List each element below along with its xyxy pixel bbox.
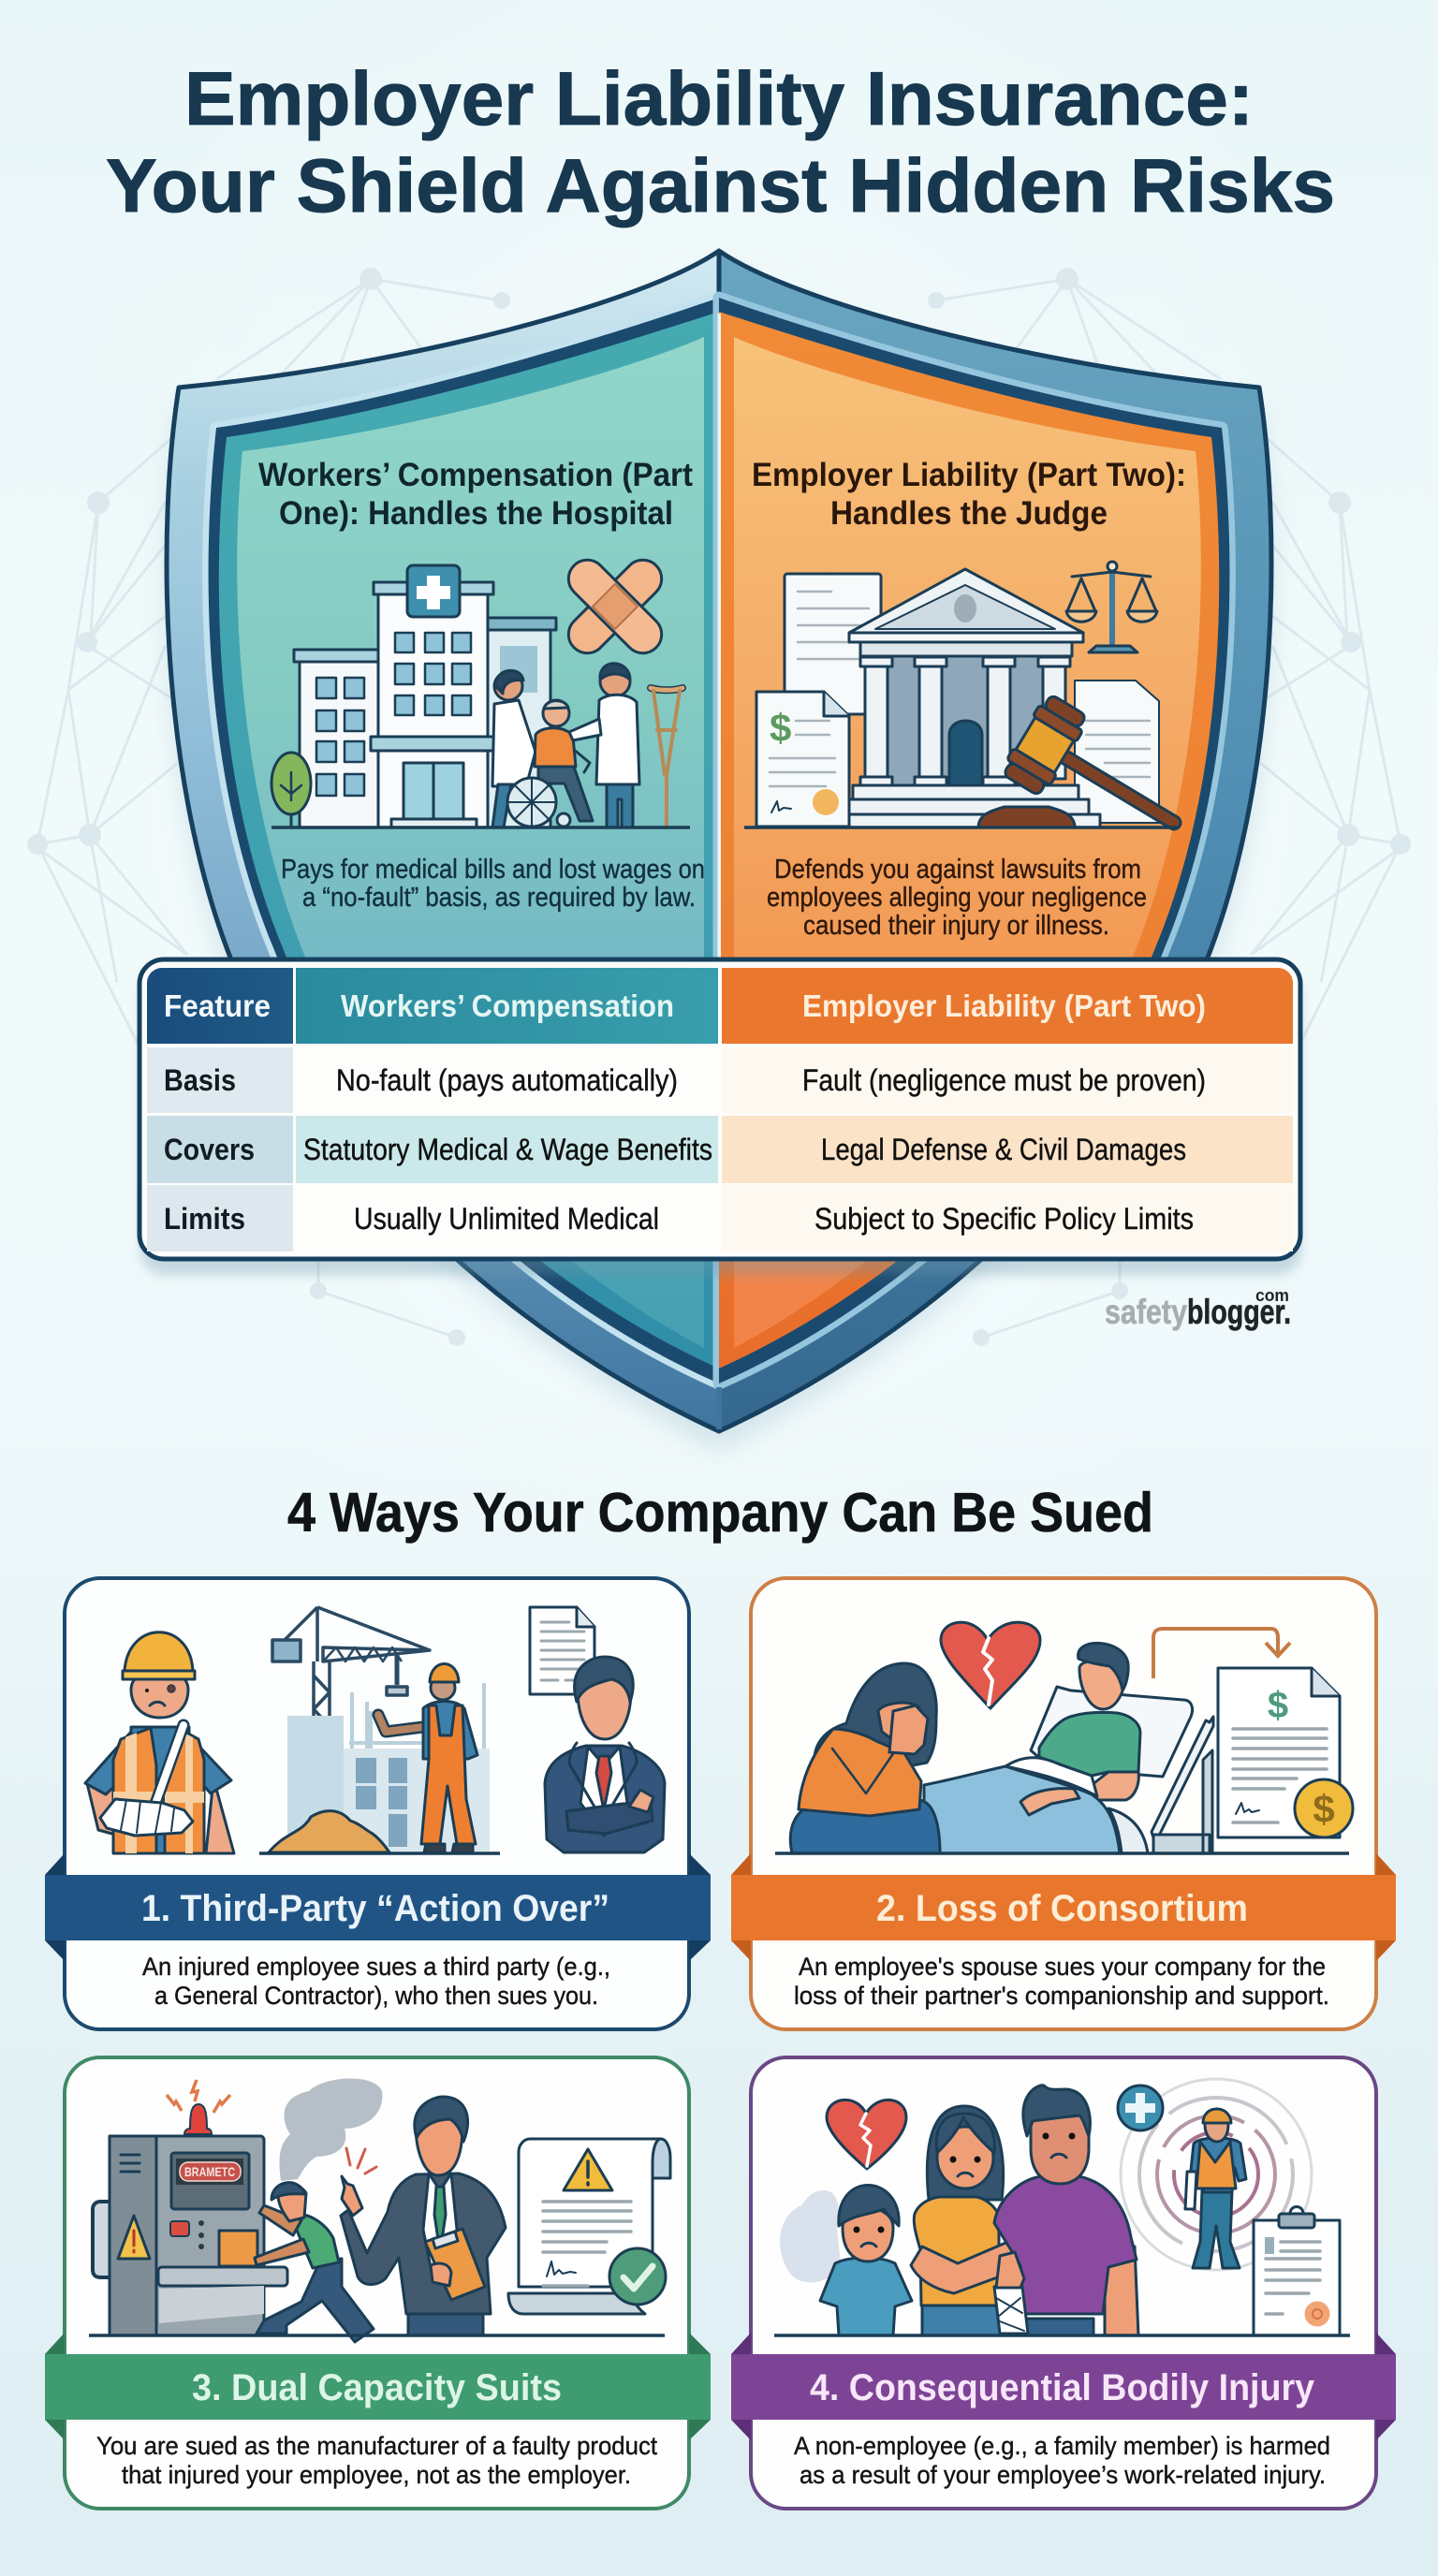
row: covers: Covers <box>164 1133 255 1166</box>
card 3 description: that injured your employee, not as the employer. <box>122 2461 631 2489</box>
heading: workers compensation: One): Handles the Hospital <box>279 495 673 532</box>
boy <box>820 2185 912 2335</box>
icon: alarm and sparks <box>167 2080 230 2134</box>
patient <box>1011 1643 1140 1804</box>
machine <box>93 2136 287 2335</box>
row: basis: No-fault (pays automatically) <box>336 1063 678 1097</box>
text block: employer liability description: caused their injury or illness. <box>803 911 1109 941</box>
nurse <box>492 670 536 827</box>
heading: workers compensation: Workers’ Compensation (Part <box>258 457 693 493</box>
card 2 description: An employee's spouse sues your company for the <box>799 1953 1326 1981</box>
card 2: loss of consortium <box>731 1578 1396 2029</box>
text block: workers comp description: a “no-fault” basis, as required by law. <box>302 883 696 913</box>
icon: broken heart <box>941 1622 1040 1708</box>
clipboard <box>1254 2207 1340 2335</box>
man <box>994 2086 1138 2335</box>
injured worker <box>85 1632 234 1853</box>
illustration: courthouse with gavel <box>744 562 1204 866</box>
documents behind courthouse <box>785 574 1159 823</box>
icon: coin: $ <box>1313 1787 1335 1831</box>
ribbon: green: 3. Dual Capacity Suits <box>192 2367 562 2408</box>
sound block <box>978 807 1075 827</box>
row: covers <box>147 1116 1293 1183</box>
card 3 description: You are sued as the manufacturer of a faulty product <box>96 2432 657 2460</box>
card 4 description: as a result of your employee’s work-related injury. <box>800 2461 1326 2489</box>
card 2 description: loss of their partner's companionship and support. <box>794 1982 1329 2010</box>
heading: workers compensation <box>258 457 693 532</box>
executive with crossed arms <box>545 1657 665 1852</box>
table header row: Workers’ Compensation <box>341 988 674 1023</box>
woman <box>911 2106 1018 2335</box>
ribbon: green <box>45 2333 711 2440</box>
card 4 description: A non-employee (e.g., a family member) is harmed <box>794 2432 1330 2460</box>
icon: gavel <box>999 692 1204 866</box>
ribbon: orange <box>731 1853 1396 1961</box>
claim document <box>1218 1668 1340 1837</box>
row: limits: Usually Unlimited Medical <box>354 1202 659 1236</box>
row: limits <box>147 1185 1293 1251</box>
icon: broken heart <box>827 2100 906 2169</box>
smoke <box>780 2190 841 2282</box>
shield <box>167 251 1271 1450</box>
arrow to claim <box>1153 1629 1290 1678</box>
manager <box>341 2097 506 2335</box>
card 3 description <box>96 2432 657 2489</box>
row: limits: Subject to Specific Policy Limits <box>814 1202 1194 1236</box>
title: Employer Liability Insurance: <box>184 57 1254 141</box>
front certificate: $ <box>770 706 791 750</box>
machine: BRAMETC <box>184 2164 235 2179</box>
front certificate <box>756 692 849 827</box>
illustration: injured worker, crane, executive <box>85 1607 665 1853</box>
row: basis <box>147 1047 1293 1113</box>
icon: medical plus <box>1118 2086 1163 2130</box>
icon: crutch <box>651 688 682 827</box>
heading: employer liability: Handles the Judge <box>830 495 1108 532</box>
bed frame and pillow <box>1031 1687 1213 1853</box>
shield right half: employer liability <box>719 251 1271 1431</box>
claim document: $ <box>1268 1685 1288 1726</box>
card 1 description <box>142 1953 610 2010</box>
ribbon: blue: 1. Third-Party “Action Over” <box>141 1888 609 1929</box>
smoke <box>279 2078 382 2181</box>
table header row <box>147 968 1293 1044</box>
text block: employer liability description: Defends you against lawsuits from <box>774 855 1141 885</box>
table header row: Feature <box>164 988 271 1023</box>
hospital building <box>294 565 556 827</box>
small worker <box>255 2183 374 2342</box>
construction worker <box>378 1664 477 1852</box>
building under construction <box>287 1683 490 1852</box>
shield left half: workers' compensation <box>167 251 719 1431</box>
illustration: spouse, hospital bed, claim <box>775 1622 1353 1853</box>
watermark logo: safety <box>1105 1293 1187 1331</box>
crying spouse <box>790 1663 940 1853</box>
card 4 description <box>794 2432 1330 2489</box>
ribbon: purple <box>731 2333 1396 2440</box>
card 1 description: a General Contractor), who then sues you. <box>154 1982 598 2010</box>
ribbon: purple: 4. Consequential Bodily Injury <box>810 2367 1315 2408</box>
heading: employer liability <box>752 457 1186 532</box>
doctor <box>569 664 639 827</box>
card 1: third-party action over <box>45 1578 711 2029</box>
watermark logo: blogger. <box>1187 1293 1291 1331</box>
text block: workers comp description <box>281 855 705 913</box>
title: Your Shield Against Hidden Risks <box>106 144 1335 228</box>
section heading: 4 Ways Your Company Can Be Sued <box>287 1482 1153 1544</box>
icon: tree <box>271 753 311 827</box>
icon: coin <box>1295 1779 1353 1837</box>
card 4: consequential bodily injury <box>731 2057 1396 2509</box>
table header row: Employer Liability (Part Two) <box>802 988 1206 1023</box>
row: covers: Legal Defense & Civil Damages <box>821 1133 1186 1166</box>
wheelchair patient <box>507 700 593 827</box>
row: covers: Statutory Medical & Wage Benefits <box>303 1133 712 1166</box>
shock rings <box>1121 2079 1312 2270</box>
watermark logo: com <box>1255 1286 1289 1305</box>
heading: employer liability: Employer Liability (Part Two): <box>752 457 1186 493</box>
illustration: faulty machine, worker, manager <box>89 2078 670 2342</box>
blanket <box>924 1758 1148 1853</box>
text block: employer liability description: employees alleging your negligence <box>767 883 1147 913</box>
icon: scales of justice <box>1066 562 1157 652</box>
illustration: hospital with staff and patient <box>271 552 690 827</box>
document <box>530 1607 594 1694</box>
title <box>106 57 1335 228</box>
courthouse <box>830 569 1100 827</box>
tower crane <box>272 1607 430 1813</box>
text block: workers comp description: Pays for medical bills and lost wages on <box>281 855 705 885</box>
comparison table <box>139 959 1300 1259</box>
icon: bandage <box>561 552 669 661</box>
warning scroll <box>508 2139 670 2314</box>
row: basis: Fault (negligence must be proven) <box>802 1063 1206 1097</box>
ribbon: blue <box>45 1853 711 1961</box>
card 1 description: An injured employee sues a third party (e.g., <box>142 1953 610 1981</box>
row: basis: Basis <box>164 1063 236 1097</box>
text block: employer liability description <box>767 855 1147 941</box>
ribbon: orange: 2. Loss of Consortium <box>876 1888 1248 1929</box>
watermark logo <box>1105 1286 1291 1331</box>
card 2 description <box>794 1953 1329 2010</box>
dirt mound <box>269 1811 389 1852</box>
injured worker figure <box>1185 2109 1246 2268</box>
card 3: dual capacity suits <box>45 2057 711 2509</box>
illustration: family and injured worker <box>774 2079 1350 2335</box>
row: limits: Limits <box>164 1202 245 1236</box>
